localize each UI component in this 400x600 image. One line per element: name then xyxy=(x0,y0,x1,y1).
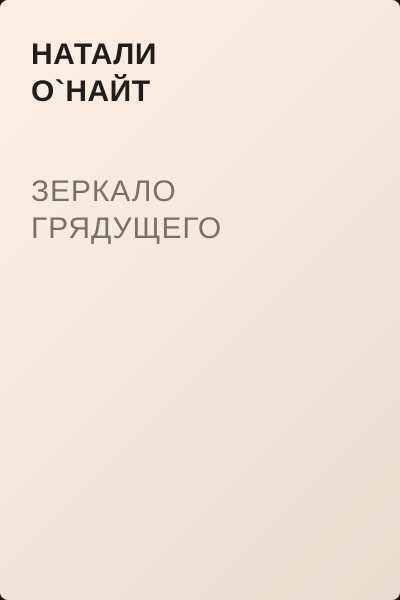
title: book title: ГРЯДУЩЕГО xyxy=(31,212,222,245)
title: book title xyxy=(31,175,222,245)
heading: author name: НАТАЛИ xyxy=(31,38,157,71)
heading: author name xyxy=(31,38,157,108)
title: book title: ЗЕРКАЛО xyxy=(31,175,177,208)
heading: author name: О`НАЙТ xyxy=(31,75,151,108)
